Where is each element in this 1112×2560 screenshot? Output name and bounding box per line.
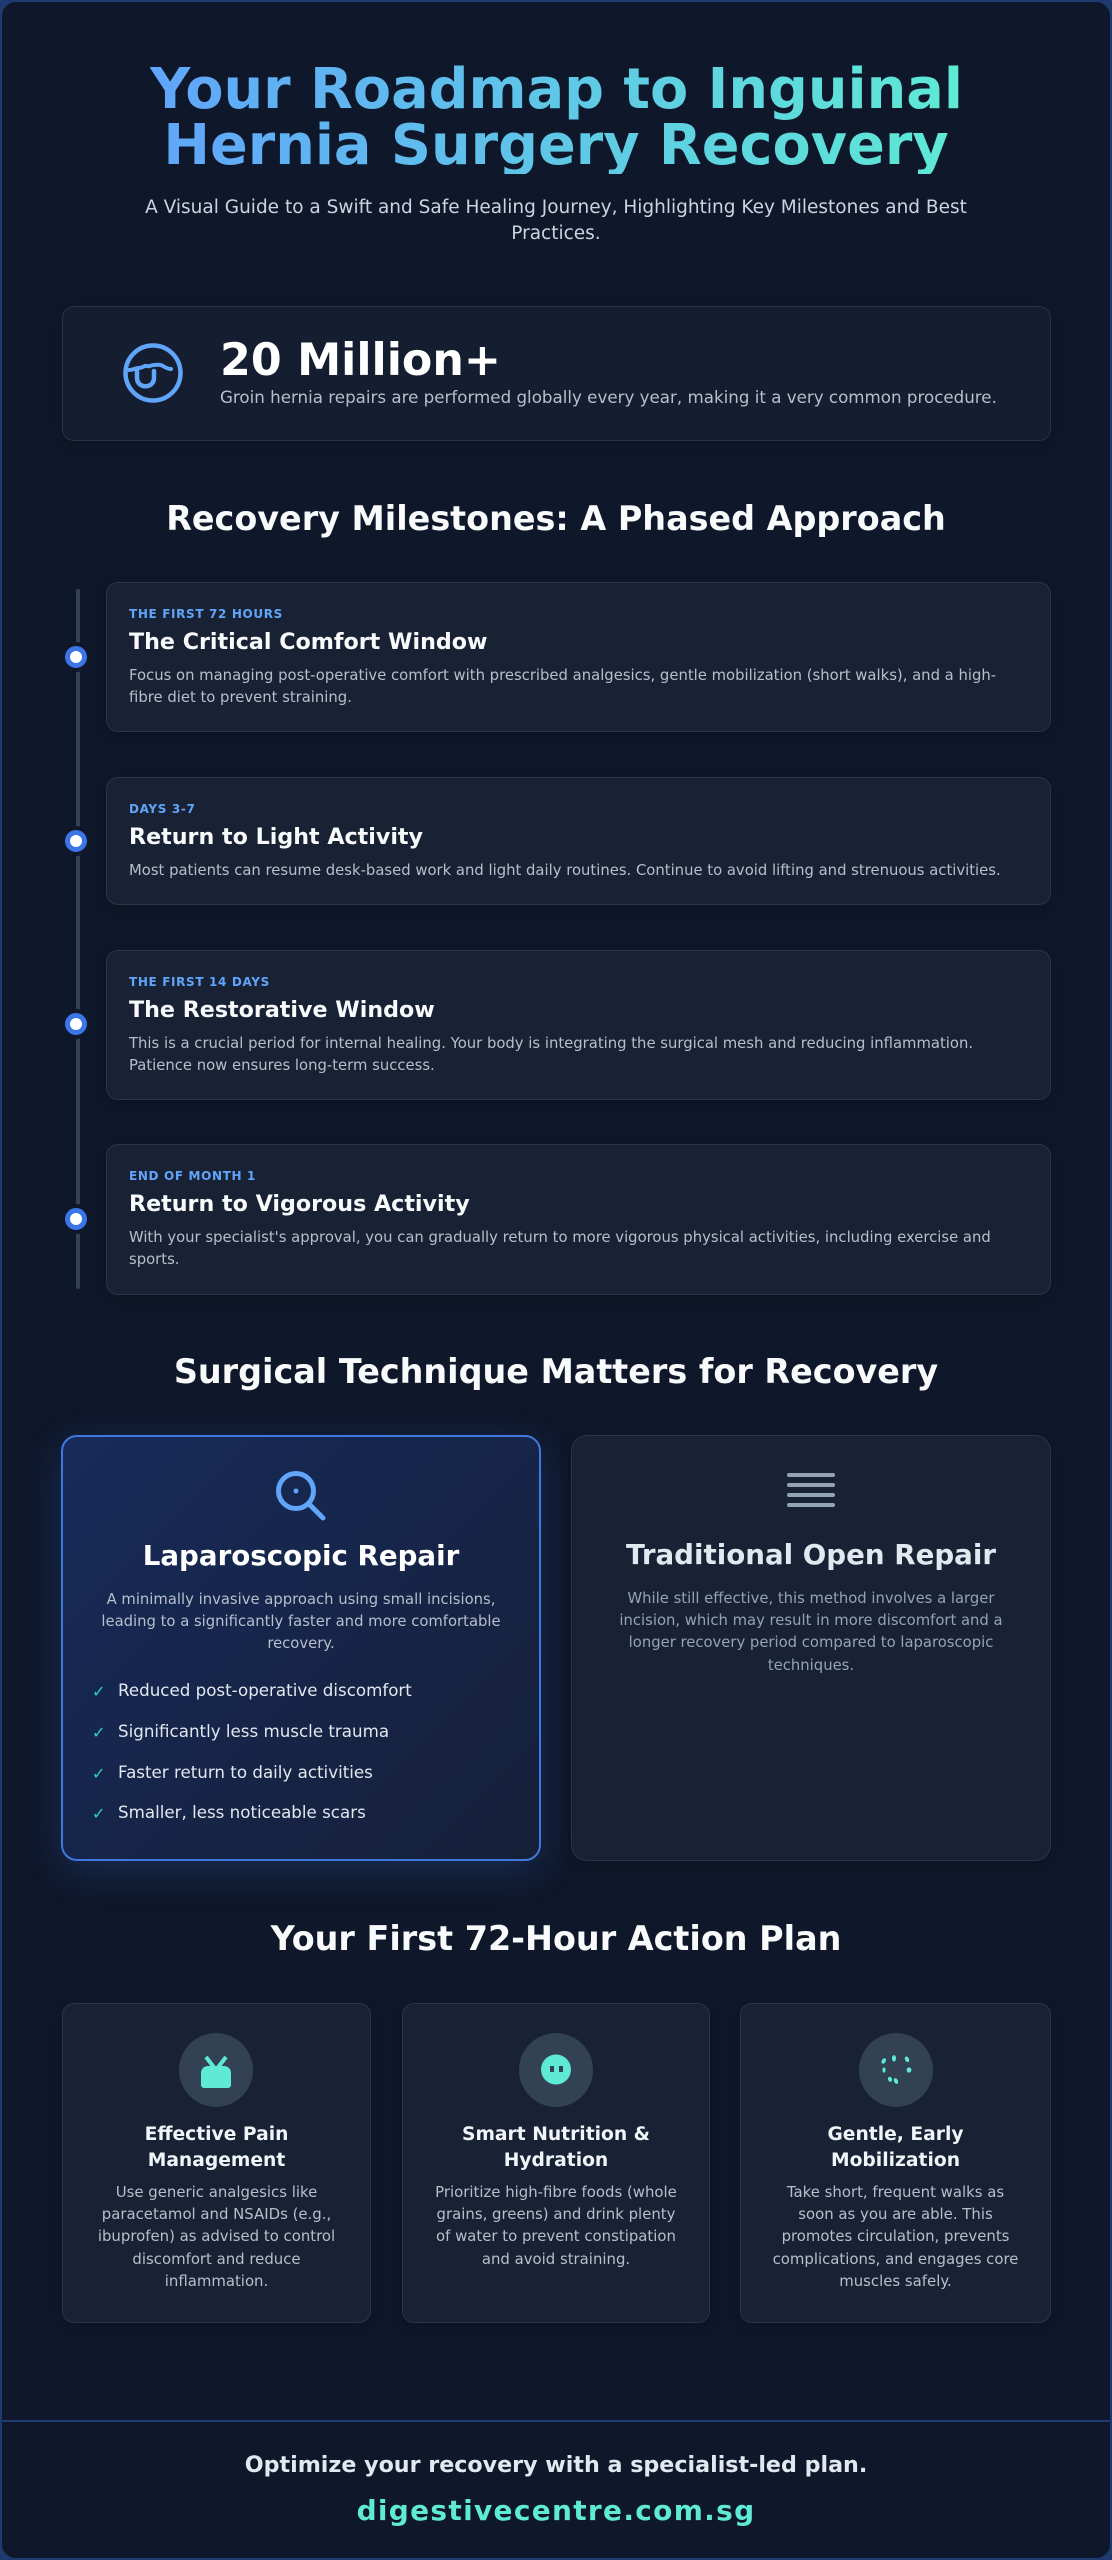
card heading: Hydration (504, 2150, 608, 2171)
panel heading: Laparoscopic Repair (143, 1539, 459, 1572)
card text: ibuprofen) as advised to control (98, 2227, 335, 2245)
card heading: Effective Pain (145, 2124, 288, 2145)
heading: action plan: Your First 72-Hour Action Plan (271, 1919, 841, 1958)
card text: complications, and engages core (773, 2250, 1018, 2268)
milestone card 1: The Critical Comfort Window (129, 629, 488, 655)
benefit 4: ✓ (92, 1804, 105, 1823)
icon: footsteps (859, 2033, 933, 2107)
action card: pain (62, 2003, 371, 2323)
panel description: techniques. (768, 1657, 854, 1674)
icon: lines (787, 1473, 835, 1507)
card text: promotes circulation, prevents (782, 2227, 1009, 2245)
panel description: incision, which may result in more discomfort and a (619, 1612, 1003, 1629)
subtitle (145, 197, 967, 244)
title: Your Roadmap to Inguinal (150, 57, 963, 122)
card heading: Mobilization (831, 2150, 960, 2171)
card heading (462, 2124, 650, 2171)
card text: soon as you are able. This (798, 2205, 993, 2223)
card text (435, 2183, 677, 2268)
milestone card 2 (106, 777, 1051, 905)
panel description (619, 1590, 1003, 1674)
card text: muscles safely. (839, 2272, 952, 2290)
card text: Prioritize high-fibre foods (whole (435, 2183, 677, 2201)
card heading (827, 2124, 964, 2171)
benefit 3: Faster return to daily activities (118, 1762, 373, 1782)
milestone card 3: The Restorative Window (129, 997, 435, 1023)
milestone card 1: THE FIRST 72 HOURS (129, 607, 283, 621)
benefit 2: ✓ (92, 1723, 105, 1742)
milestone card 1: Focus on managing post-operative comfort with prescribed analgesics, gentle mobilization (short walks), and a high- (129, 667, 996, 684)
icon: nutrition (519, 2033, 593, 2107)
card text: paracetamol and NSAIDs (e.g., (102, 2205, 331, 2223)
panel: traditional open repair (571, 1435, 1051, 1861)
milestone card 4 (106, 1144, 1051, 1295)
card heading: Management (148, 2150, 285, 2171)
panel heading: Traditional Open Repair (626, 1538, 996, 1571)
milestone card 2: DAYS 3-7 (129, 802, 196, 816)
milestone card 4: Return to Vigorous Activity (129, 1191, 470, 1217)
card text (773, 2183, 1018, 2290)
subtitle: Practices. (511, 223, 601, 244)
milestone card 3 (106, 950, 1051, 1100)
benefit 4: Smaller, less noticeable scars (118, 1802, 366, 1822)
card text: of water to prevent constipation (436, 2227, 676, 2245)
icon: magnifier (276, 1471, 326, 1520)
subtitle: A Visual Guide to a Swift and Safe Healing Journey, Highlighting Key Milestones and Best (145, 197, 967, 218)
panel: statistic (62, 306, 1051, 441)
milestone card 2: Return to Light Activity (129, 824, 423, 850)
benefit 3: ✓ (92, 1764, 105, 1783)
card heading: Gentle, Early (827, 2124, 964, 2145)
panel description: longer recovery period compared to laparoscopic (629, 1634, 993, 1651)
milestone card 4: sports. (129, 1251, 180, 1268)
icon: hernia circle (123, 343, 183, 403)
card heading: Smart Nutrition & (462, 2124, 650, 2145)
title: Hernia Surgery Recovery (163, 113, 949, 178)
footer message: Optimize your recovery with a specialist-led plan. (245, 2452, 867, 2478)
milestone card 4: END OF MONTH 1 (129, 1169, 256, 1183)
card heading (145, 2124, 288, 2171)
milestone card 2: Most patients can resume desk-based work and light daily routines. Continue to avoid lifting and strenuous activities. (129, 862, 1001, 879)
benefit 2: Significantly less muscle trauma (118, 1721, 389, 1741)
milestone card 3: THE FIRST 14 DAYS (129, 975, 270, 989)
milestone card 1 (106, 582, 1051, 732)
panel description: While still effective, this method involves a larger (628, 1590, 994, 1607)
card text: Use generic analgesics like (116, 2183, 317, 2201)
timeline (65, 589, 87, 1289)
panel: laparoscopic repair (61, 1435, 541, 1861)
milestone card 3: This is a crucial period for internal healing. Your body is integrating the surgical mesh and reducing inflammation. (129, 1035, 973, 1052)
milestone card 3: Patience now ensures long-term success. (129, 1057, 435, 1074)
card text: and avoid straining. (482, 2250, 630, 2268)
title (150, 62, 962, 174)
footer (2, 2420, 1110, 2560)
action card: mobilization (740, 2003, 1051, 2323)
card text: discomfort and reduce (132, 2250, 301, 2268)
footer website: digestivecentre.com.sg (357, 2494, 755, 2527)
milestone marker 3 (65, 1013, 87, 1035)
panel description: A minimally invasive approach using small incisions, (107, 1591, 495, 1608)
panel description: leading to a significantly faster and more comfortable (101, 1613, 501, 1630)
benefit 1: ✓ (92, 1682, 105, 1701)
milestone marker 1 (65, 646, 87, 668)
card text: grains, greens) and drink plenty (437, 2205, 675, 2223)
icon: pain (179, 2033, 253, 2107)
panel description: recovery. (267, 1635, 335, 1652)
action card: nutrition (402, 2003, 710, 2323)
card text: Take short, frequent walks as (787, 2183, 1004, 2201)
benefit 1: Reduced post-operative discomfort (118, 1680, 412, 1700)
milestone marker 2 (65, 830, 87, 852)
statistic number: 20 Million+ (220, 335, 501, 386)
milestone card 1: fibre diet to prevent straining. (129, 689, 352, 706)
heading: surgical technique: Surgical Technique Matters for Recovery (174, 1352, 938, 1391)
milestone marker 4 (65, 1208, 87, 1230)
card text (98, 2183, 335, 2290)
milestone card 4: With your specialist's approval, you can gradually return to more vigorous physical activities, including exercise and (129, 1229, 991, 1246)
benefit list (92, 1680, 412, 1823)
heading: recovery milestones: Recovery Milestones: A Phased Approach (166, 499, 946, 538)
statistic description: Groin hernia repairs are performed globally every year, making it a very common procedure. (220, 387, 997, 407)
timeline line (76, 589, 80, 1289)
card text: inflammation. (165, 2272, 268, 2290)
panel description (101, 1591, 501, 1652)
